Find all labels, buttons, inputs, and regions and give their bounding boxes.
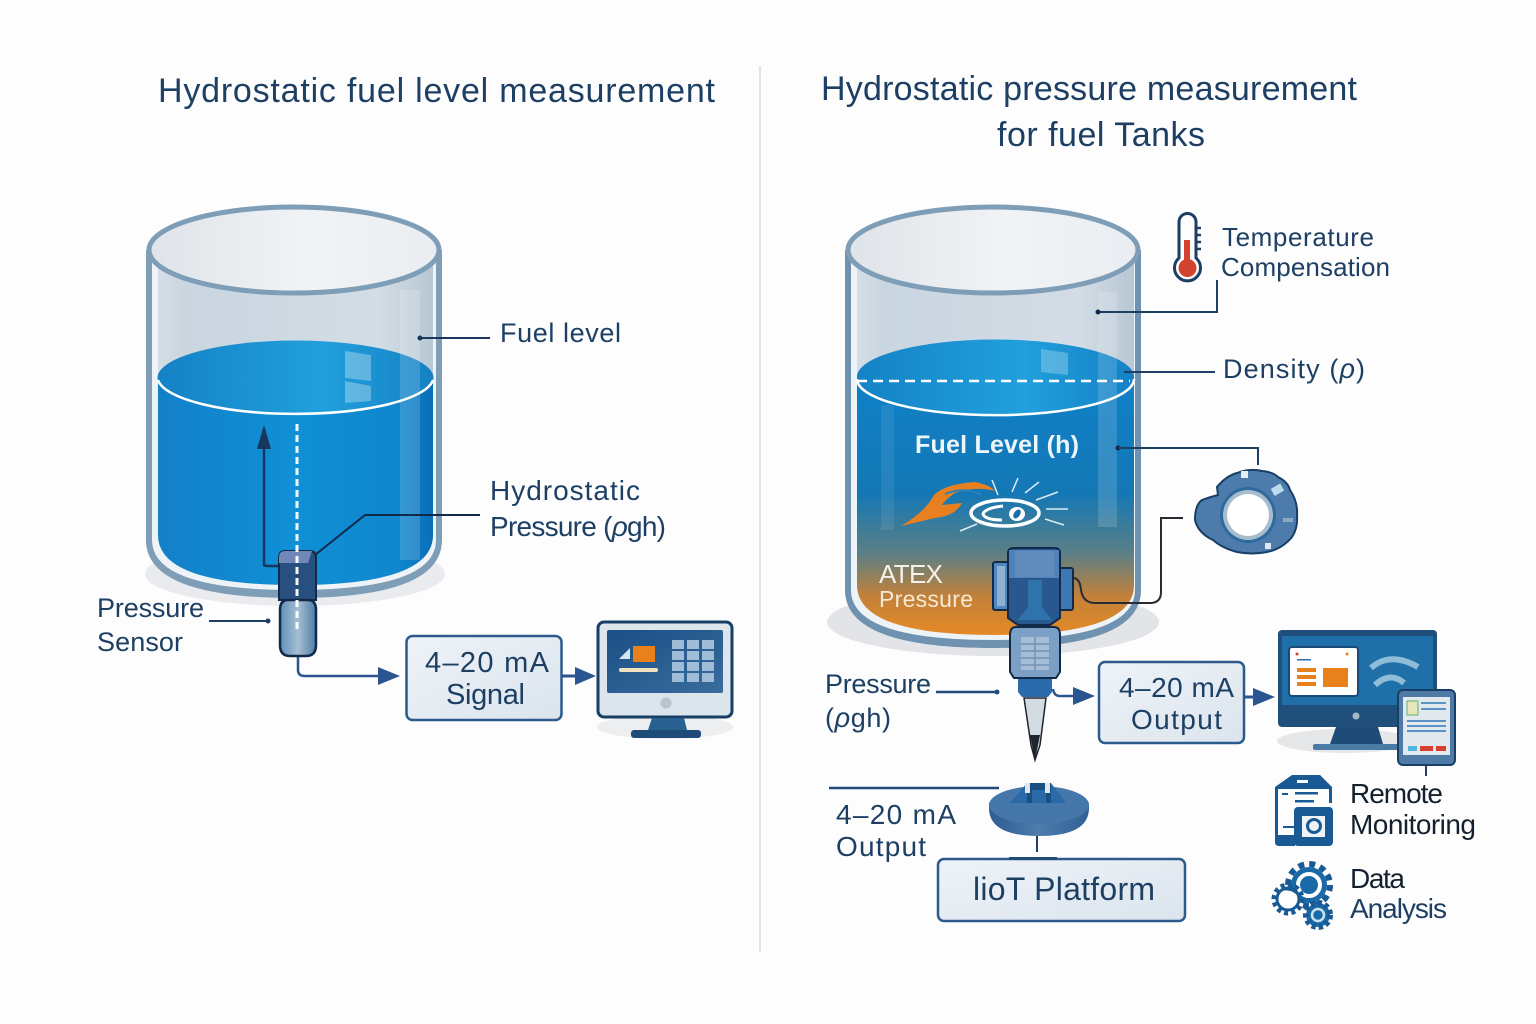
ATEX text: Pressure	[879, 586, 973, 612]
signal arrow	[298, 657, 382, 676]
title: right panel: for fuel Tanks	[997, 116, 1205, 154]
title: right panel: Hydrostatic pressure measurement	[821, 70, 1358, 108]
arrow: output to monitor	[1245, 688, 1275, 706]
tank rim	[149, 207, 439, 293]
height arrow	[264, 445, 308, 566]
fuel surface	[158, 340, 434, 416]
arrow: transmitter to output	[1053, 687, 1095, 705]
icon: remote monitoring	[1275, 775, 1333, 846]
leader to ring	[1073, 518, 1183, 603]
icon: ring flange	[1195, 470, 1297, 554]
label: remote monitoring: Monitoring	[1350, 809, 1476, 840]
box: IIoT platform	[938, 857, 1185, 921]
icon: gateway puck	[989, 783, 1089, 852]
label: 4-20 mA output lower: 4–20 mA	[836, 799, 956, 830]
box: 4-20 mA output: 4–20 mA	[1119, 672, 1234, 703]
label: pressure sensor: Sensor	[97, 627, 183, 657]
label: data analysis: Data	[1350, 863, 1405, 894]
box: 4-20 mA output: Output	[1131, 704, 1222, 735]
fuel body	[158, 378, 433, 585]
box: 4-20 mA signal: 4–20 mA	[425, 647, 550, 679]
label: density: Density (ρ)	[1223, 354, 1365, 384]
label: hydrostatic pressure: Pressure (ρgh)	[490, 511, 666, 542]
icon: pressure transmitter	[993, 548, 1073, 760]
label: 4-20 mA output lower: Output	[836, 831, 926, 862]
pressure sensor	[279, 551, 316, 656]
label: data analysis: Analysis	[1350, 893, 1447, 924]
label: remote monitoring	[1350, 778, 1476, 840]
fuel level text: Fuel Level (h)	[915, 431, 1079, 459]
label: fuel level	[418, 318, 621, 348]
label: hydrostatic pressure: Hydrostatic	[490, 475, 640, 506]
label: temperature compensation: Compensation	[1221, 252, 1390, 282]
icon: temperature thermometer	[1174, 214, 1201, 281]
panel: right fuel tank	[827, 207, 1183, 760]
label: pressure sensor	[97, 593, 270, 657]
label: temperature compensation	[1096, 222, 1390, 314]
label: data analysis	[1350, 863, 1447, 924]
ATEX text	[879, 559, 973, 612]
icon: orange flame and logo	[901, 478, 1068, 531]
box: 4-20 mA output	[1099, 662, 1244, 743]
label: fuel level: Fuel level	[500, 318, 621, 348]
title: right panel	[821, 70, 1358, 154]
divider	[759, 66, 761, 952]
label: pressure rho g h: Pressure	[825, 669, 931, 699]
tank rim	[848, 207, 1138, 293]
fuel body with orange base	[857, 378, 1134, 635]
icon: data analysis gears	[1274, 864, 1330, 927]
icon: right monitor and tablet	[1277, 630, 1455, 776]
icon: left monitor	[597, 622, 733, 739]
box: 4-20 mA signal: Signal	[446, 679, 525, 711]
box: IIoT platform: lioT Platform	[973, 871, 1155, 907]
fuel surface	[857, 340, 1134, 414]
leader: fuel level to ring	[1116, 446, 1258, 465]
label: pressure rho g h: (ρgh)	[825, 703, 891, 733]
arrow: signal to monitor	[562, 667, 596, 685]
label: pressure sensor: Pressure	[97, 593, 204, 623]
label: remote monitoring: Remote	[1350, 778, 1443, 809]
label: 4-20 mA output lower	[829, 788, 999, 862]
panel: left fuel tank	[145, 207, 445, 685]
label: pressure rho g h	[825, 669, 1000, 733]
ATEX text: ATEX	[879, 559, 943, 589]
label: temperature compensation: Temperature	[1222, 222, 1374, 252]
label: hydrostatic pressure	[315, 475, 666, 555]
box: 4-20 mA signal	[406, 636, 562, 720]
title: left panel: Hydrostatic fuel level measurement	[158, 72, 716, 110]
